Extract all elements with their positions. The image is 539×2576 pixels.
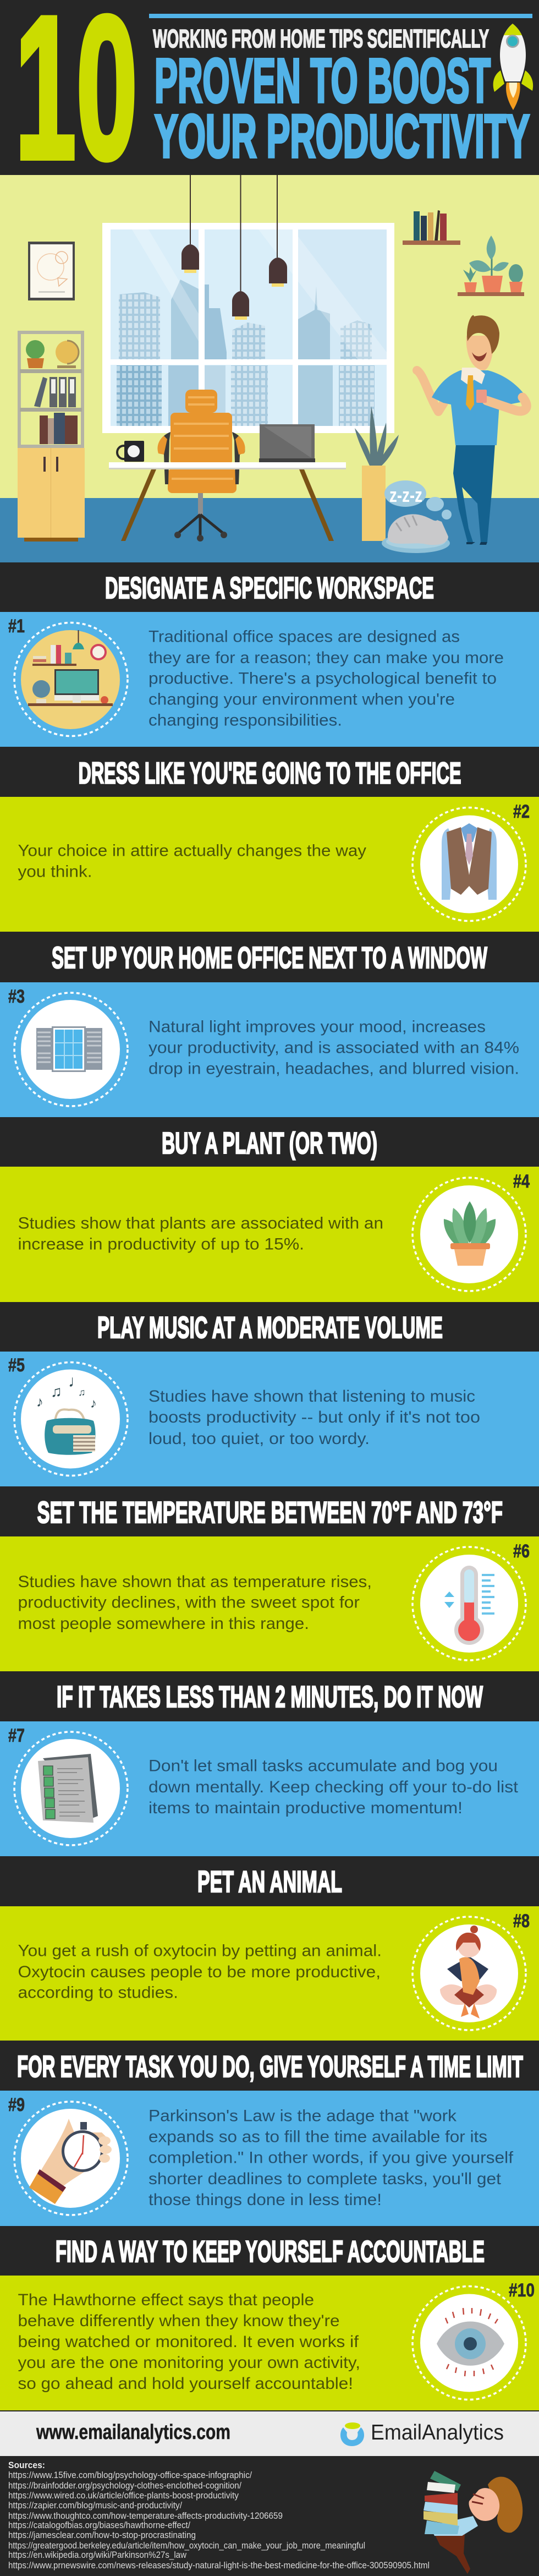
sources list: https://greatergood.berkeley.edu/article/item/how_oxytocin_can_make_your_job_more_meaningful <box>8 2540 365 2551</box>
body text 7: Don't let small tasks accumulate and bog you <box>148 1757 498 1775</box>
illustration: boy carrying stack of books <box>424 2471 522 2574</box>
icon: retro radio with notes: ♩ <box>68 1372 85 1391</box>
sources list: https://catalogofbias.org/biases/hawthorne-effect/ <box>8 2520 190 2530</box>
pendant lamps <box>182 175 287 320</box>
icon: thermometer <box>413 1547 526 1660</box>
blue rule <box>149 14 532 18</box>
number 6: #6 <box>513 1541 530 1562</box>
icon: retro radio with notes: ♪ <box>36 1393 43 1410</box>
number 9: #9 <box>8 2094 25 2115</box>
body text 8 <box>18 1942 382 2002</box>
sources list: https://zapier.com/blog/music-and-productivity/ <box>8 2500 182 2511</box>
body text 9: Parkinson's Law is the adage that "work <box>148 2107 457 2125</box>
number 7: #7 <box>8 1725 25 1746</box>
number 1: #1 <box>8 616 25 637</box>
body text 9: shorter deadlines to complete tasks, you'll get <box>148 2170 501 2188</box>
bookshelf on wall <box>403 210 460 245</box>
sources list: https://en.wikipedia.org/wiki/Parkinson%27s_law <box>8 2550 187 2560</box>
hero illustration: home office <box>0 175 539 562</box>
body text 10: The Hawthorne effect says that people <box>18 2291 314 2309</box>
logo icon <box>340 2422 364 2446</box>
body text 9 <box>148 2107 514 2209</box>
body text 1 <box>148 628 504 729</box>
green panel 10 <box>0 2276 539 2410</box>
body text 10 <box>18 2291 360 2393</box>
icon: vest and shirt <box>413 808 526 921</box>
desk <box>109 462 346 541</box>
sources list: https://www.15five.com/blog/psychology-office-space-infographic/ <box>8 2470 252 2480</box>
icon: retro radio with notes <box>14 1363 128 1476</box>
section 1: designate a workspace <box>0 571 539 747</box>
section 4: plant <box>0 1126 539 1302</box>
blue panel 7 <box>0 1721 539 1856</box>
header title block <box>15 0 533 201</box>
body text 4 <box>18 1214 383 1254</box>
number 5: #5 <box>8 1355 25 1376</box>
logo wordmark: EmailAnalytics <box>371 2421 504 2444</box>
footer brand bar <box>0 2411 539 2456</box>
body text 10: behave differently when they know they're <box>18 2312 340 2330</box>
wall <box>0 175 539 498</box>
body text 7: down mentally. Keep checking off your to-do list <box>148 1778 518 1796</box>
body text 1: changing your environment when you're <box>148 691 455 709</box>
heading 4: BUY A PLANT (OR TWO) <box>162 1126 377 1160</box>
body text 3: drop in eyestrain, headaches, and blurred vision. <box>148 1060 519 1078</box>
man with mug <box>417 315 529 545</box>
sources list: https://www.wired.co.uk/article/office-plants-boost-productivity <box>8 2490 239 2501</box>
body text 2 <box>18 842 366 881</box>
body text 6: Studies have shown that as temperature rises, <box>18 1573 372 1591</box>
icon: retro radio with notes: ♫ <box>51 1383 62 1400</box>
icon: rocket <box>493 24 533 110</box>
sources list: https://jamesclear.com/how-to-stop-procrastinating <box>8 2530 196 2540</box>
mug <box>117 441 144 462</box>
sources list: https://brainfodder.org/psychology-clothes-enclothed-cognition/ <box>8 2480 241 2491</box>
potted plants on wall shelf <box>458 236 524 296</box>
sources list: https://www.prnewswire.com/news-releases/study-natural-light-is-the-best-medicine-for-the-office-300590905.html <box>8 2560 430 2570</box>
body text 5: Studies have shown that listening to music <box>148 1387 475 1405</box>
body text 1: Traditional office spaces are designed as <box>148 628 460 646</box>
body text 3: your productivity, and is associated with an 84% <box>148 1039 519 1057</box>
section 3: window <box>0 940 539 1117</box>
sources list: https://www.thoughtco.com/how-temperature-affects-productivity-1206659 <box>8 2511 283 2521</box>
body text 3: Natural light improves your mood, increases <box>148 1018 486 1036</box>
green panel 4 <box>0 1167 539 1302</box>
body text 10: you are the one monitoring your own activity, <box>18 2354 360 2372</box>
blue panel 5 <box>0 1352 539 1486</box>
icon: hand with stopwatch <box>14 2102 128 2215</box>
window with skyline <box>102 223 394 433</box>
body text 10: being watched or monitored. It even works if <box>18 2333 359 2351</box>
snake plant <box>355 406 399 541</box>
body text 5: boosts productivity -- but only if it's not too <box>148 1408 480 1426</box>
laptop <box>259 424 315 462</box>
heading 8: PET AN ANIMAL <box>197 1864 342 1899</box>
body text 6 <box>18 1573 372 1633</box>
section 2: dress for the office <box>0 756 539 932</box>
body text 10: so go ahead and hold yourself accountable! <box>18 2375 353 2393</box>
icon: retro radio with notes: ♪ <box>90 1396 97 1411</box>
icon: window with shutters <box>14 993 128 1106</box>
body text 8: according to studies. <box>18 1984 178 2002</box>
body text 7 <box>148 1757 518 1817</box>
body text 7: items to maintain productive momentum! <box>148 1799 463 1817</box>
body text 9: completion." In other words, if you give yourself <box>148 2149 514 2167</box>
section 9: time limit <box>0 2049 539 2226</box>
body text 6: productivity declines, with the sweet spot for <box>18 1594 360 1612</box>
body text 4: Studies show that plants are associated with an <box>18 1214 383 1233</box>
body text 8: You get a rush of oxytocin by petting an animal. <box>18 1942 382 1960</box>
blue panel 1 <box>0 612 539 747</box>
green panel 2 <box>0 797 539 932</box>
floor <box>0 498 539 562</box>
blue panel 9 <box>0 2091 539 2226</box>
section 10: accountability <box>0 2234 539 2410</box>
section 5: music <box>0 1310 539 1486</box>
body text 1: productive. There's a psychological benefit to <box>148 669 497 688</box>
body text 4: increase in productivity of up to 15%. <box>18 1235 304 1254</box>
website url: www.emailanalytics.com <box>36 2421 230 2444</box>
body text 5 <box>148 1387 480 1448</box>
body text 9: those things done in less time! <box>148 2191 382 2209</box>
sleeping cat: z-z-z <box>389 484 422 506</box>
body text 9: expands so as to fill the time available for its <box>148 2128 487 2146</box>
number 2: #2 <box>513 801 530 822</box>
sources list <box>8 2460 430 2570</box>
icon: eye <box>413 2286 526 2399</box>
number 3: #3 <box>8 986 25 1007</box>
green panel 6 <box>0 1536 539 1671</box>
body text 3 <box>148 1018 519 1078</box>
green panel 8 <box>0 1906 539 2041</box>
body text 2: Your choice in attire actually changes the way <box>18 842 366 860</box>
body text 1: changing responsibilities. <box>148 711 342 729</box>
sources list: Sources: <box>8 2460 45 2470</box>
section 8: pet an animal <box>0 1864 539 2041</box>
sleeping cat <box>382 480 452 553</box>
bookcase cabinet <box>18 331 85 542</box>
section 6: temperature <box>0 1495 539 1671</box>
body text 1: they are for a reason; they can make you more <box>148 649 504 667</box>
icon: desk workspace <box>14 623 128 736</box>
icon: checklist <box>14 1732 128 1845</box>
icon: potted plant <box>413 1178 526 1291</box>
body text 2: you think. <box>18 863 92 881</box>
office chair <box>157 390 245 542</box>
number 8: #8 <box>513 1911 530 1932</box>
body text 5: loud, too quiet, or too wordy. <box>148 1430 370 1448</box>
picture frame <box>28 242 75 300</box>
icon: woman hugging pet <box>413 1917 526 2030</box>
body text 6: most people somewhere in this range. <box>18 1615 309 1633</box>
section 7: two minutes <box>0 1680 539 1856</box>
blue panel 3 <box>0 982 539 1117</box>
body text 8: Oxytocin causes people to be more productive, <box>18 1963 381 1981</box>
icon: retro radio with notes: ♫ <box>78 1387 86 1398</box>
number 4: #4 <box>513 1171 530 1192</box>
